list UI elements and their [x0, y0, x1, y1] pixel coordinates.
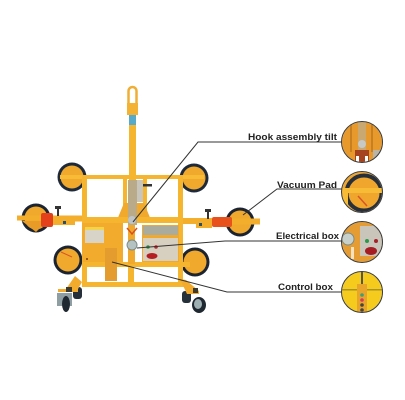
label: vacuum pad: Vacuum Pad	[277, 180, 337, 191]
tilt mechanism	[127, 180, 152, 250]
label: electrical box: Electrical box	[276, 231, 340, 242]
caster: right	[180, 279, 206, 313]
machine: vacuum lifter	[17, 87, 260, 313]
arm: left	[17, 204, 83, 232]
label: control box: Control box	[278, 282, 334, 293]
infographic: vacuum lifter with feature callouts	[17, 86, 383, 313]
caster: left	[57, 276, 82, 312]
vacuum pad: lower right	[180, 248, 210, 276]
arm: right	[182, 208, 260, 236]
frame	[82, 175, 190, 287]
label: hook assembly tilt: Hook assembly tilt	[248, 132, 338, 143]
vacuum pad: lower left	[54, 246, 82, 274]
callout line: hook assembly tilt	[133, 142, 342, 222]
detail circle: electrical box	[341, 221, 383, 263]
callout line: control box	[112, 262, 342, 292]
callout line: electrical box	[137, 241, 342, 248]
electrical box	[142, 225, 179, 262]
detail circle: hook assembly tilt	[340, 120, 384, 164]
detail circle: control box	[340, 270, 384, 314]
detail circle: vacuum pad	[340, 170, 384, 214]
main box	[82, 223, 123, 281]
callout line: vacuum pad	[243, 189, 342, 215]
hook handle	[127, 87, 138, 180]
vacuum pad: top right	[180, 164, 208, 192]
vacuum pad: top left	[58, 162, 86, 192]
